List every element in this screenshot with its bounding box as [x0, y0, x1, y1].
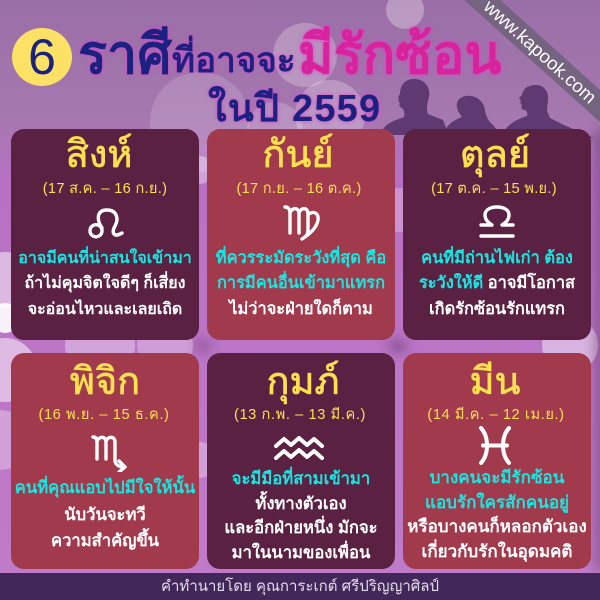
panel: Scorpio: คนที่คุณแอบไปมีใจให้นั้น [15, 478, 195, 497]
panel: Pisces: มีน [469, 361, 521, 403]
title: มีรักซ้อน [298, 25, 501, 85]
panel: Leo [11, 129, 199, 340]
number badge 6: 6 [28, 29, 56, 85]
panel: Libra: ระวังให้ดี อาจมีโอกาส [419, 274, 575, 292]
footer credit: คำทำนายโดย คุณการะเกต์ ศรีปริญญาศิลป์ [161, 578, 439, 595]
panel: Libra: คนที่มีถ่านไฟเก่า ต้อง [421, 248, 573, 266]
icon: Leo [88, 208, 124, 238]
panel: Pisces: (14 มี.ค. – 12 เม.ย.) [427, 407, 565, 423]
panel: Virgo: (17 ก.ย. – 16 ต.ค.) [236, 181, 362, 197]
icon: Pisces [478, 426, 512, 465]
footer credit [0, 573, 600, 600]
panel: Virgo: ไม่ว่าจะฝ่ายใดก็ตาม [229, 300, 373, 318]
panel: Scorpio: พิจิก [70, 361, 140, 403]
panel: Pisces: บางคนจะมีรักซ้อน [430, 468, 564, 487]
icon: Virgo [283, 205, 320, 241]
panel: Libra: (17 ต.ค. – 15 พ.ย.) [431, 181, 557, 197]
icon: Libra [479, 205, 515, 238]
panel: Virgo: การมีคนอื่นเข้ามาแทรก [217, 274, 385, 292]
panel: Scorpio: (16 พ.ย. – 15 ธ.ค.) [38, 407, 169, 423]
panel: Scorpio: นับวันจะทวี [64, 504, 146, 524]
panel: Aquarius: กุมภ์ [266, 361, 340, 403]
ribbon: website address [432, 0, 600, 151]
panel: Leo: สิงห์ [66, 134, 132, 176]
panel: Pisces: เกี่ยวกับรักในอุดมคติ [422, 542, 572, 561]
title: ราศี [78, 25, 172, 85]
panel: Aquarius: จะมีมือที่สามเข้ามา [232, 469, 370, 488]
panel: Scorpio: ความสำคัญขึ้น [51, 531, 159, 550]
panel: Libra: เกิดรักซ้อนรักแทรก [429, 300, 565, 318]
panel: Virgo: กันย์ [262, 134, 334, 176]
panel: Libra: ตุลย์ [460, 134, 530, 176]
panel: Pisces: แอบรักใครสักคนอยู่ [425, 493, 569, 512]
panel: Pisces: หรือบางคนก็หลอกตัวเอง [407, 517, 587, 536]
icon: Aquarius [274, 436, 324, 460]
panel: Aquarius: (13 ก.พ. – 13 มี.ค.) [234, 407, 366, 423]
panel: Leo: อาจมีคนที่น่าสนใจเข้ามา [18, 250, 192, 266]
panel: Leo: จะอ่อนไหวและเลยเถิด [28, 300, 182, 318]
panel: Pisces [403, 353, 591, 569]
panel: Aquarius: มาในนามของเพื่อน [232, 543, 370, 562]
panel: Scorpio [11, 353, 199, 569]
panel: Virgo [207, 129, 395, 340]
panel: Aquarius [207, 353, 395, 569]
panel: Aquarius: และอีกฝ่ายหนึ่ง มักจะ [224, 518, 378, 537]
panel: Leo: (17 ส.ค. – 16 ก.ย.) [43, 181, 167, 197]
panel: Leo: ถ้าไม่คุมจิตใจดีๆ ก็เสี่ยง [24, 275, 186, 292]
title: ในปี 2559 [208, 88, 381, 130]
panel: Aquarius: ทั้งทางตัวเอง [255, 494, 347, 513]
number badge 6 [12, 28, 72, 86]
icon: Scorpio [91, 435, 127, 472]
panel: Virgo: ที่ควรระมัดระวังที่สุด คือ [216, 248, 386, 266]
panel: Libra [403, 129, 591, 340]
title: ที่อาจจะ [172, 41, 296, 80]
title [78, 24, 503, 130]
